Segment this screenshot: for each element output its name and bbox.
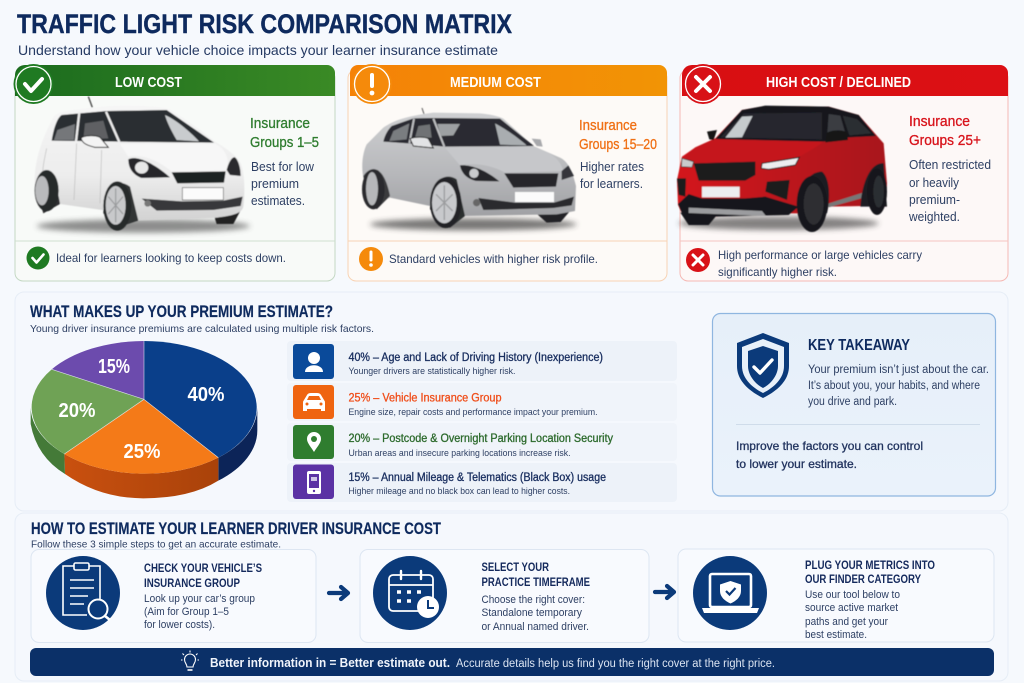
key takeaway advice (736, 439, 923, 471)
step 1 card (31, 550, 316, 642)
panel: how to estimate (15, 513, 1008, 681)
low cost header: LOW COST (115, 74, 182, 91)
step 2 body: Standalone temporary (482, 607, 582, 619)
panel: low cost (14, 64, 335, 281)
key takeaway body: you drive and park. (808, 396, 897, 408)
low cost note: Ideal for learners looking to keep costs down. (56, 251, 286, 265)
medium cost header (350, 65, 667, 96)
icon: footer cross (686, 248, 710, 272)
step 2 card (360, 550, 649, 642)
step 2 title: SELECT YOUR (482, 562, 550, 574)
icon: shield (737, 333, 789, 398)
low cost group label: Groups 1–5 (250, 135, 319, 151)
step 3 body: Use our tool below to (805, 589, 900, 601)
low cost description: Best for low (251, 160, 315, 174)
legend row: mileage (293, 464, 606, 499)
panel: medium cost (348, 64, 667, 281)
medium cost description: for learners. (580, 177, 643, 191)
step 3 title: OUR FINDER CATEGORY (805, 574, 921, 586)
medium cost group label (579, 118, 657, 153)
high cost header: HIGH COST / DECLINED (766, 74, 911, 91)
pie label 40%: 40% (188, 384, 225, 406)
banner (30, 648, 994, 676)
high cost description: Often restricted (909, 158, 991, 172)
medium cost note: Standard vehicles with higher risk profile. (389, 252, 598, 266)
step 3 body: paths and get your (805, 616, 888, 628)
medium cost group label: Groups 15–20 (579, 137, 657, 153)
high cost note (718, 248, 922, 279)
step 1 title (144, 563, 262, 590)
legend row: vehicle: Engine size, repair costs and performance impact your premium. (348, 407, 598, 418)
high cost description (908, 158, 991, 224)
step 1 title: CHECK YOUR VEHICLE’S (144, 563, 262, 575)
car: white hatchback (35, 97, 250, 233)
legend row: postcode: 20% – Postcode & Overnight Parking Location Security (348, 433, 613, 445)
banner text: Accurate details help us find you the right cover at the right price. (456, 658, 775, 670)
step 2 title (482, 562, 590, 589)
medium cost group label: Insurance (579, 118, 637, 134)
car: red suv (677, 106, 887, 232)
step 1 body: Look up your car’s group (144, 593, 255, 605)
how-to subheading: Follow these 3 simple steps to get an accurate estimate. (31, 538, 281, 550)
icon: clipboard search (46, 556, 120, 630)
key takeaway body (808, 364, 989, 408)
legend row: mileage: 15% – Annual Mileage & Telematics (Black Box) usage (348, 472, 606, 484)
icon: footer check (26, 246, 50, 270)
legend row: age (293, 344, 603, 379)
legend row: mileage: Higher mileage and no black box can lead to higher costs. (348, 486, 570, 497)
icon: footer warning (359, 247, 383, 271)
low cost header (15, 65, 335, 96)
legend row: vehicle (293, 385, 598, 419)
key takeaway advice: to lower your estimate. (736, 457, 857, 471)
step 2 body: or Annual named driver. (482, 621, 589, 633)
arrow (329, 587, 348, 599)
step 3 card (678, 549, 994, 642)
low cost description: estimates. (251, 194, 305, 208)
how-to heading: HOW TO ESTIMATE YOUR LEARNER DRIVER INSURANCE COST (31, 519, 441, 538)
key takeaway body: It’s about you, your habits, and where (808, 380, 980, 392)
high cost description: or heavily (909, 176, 960, 190)
icon: cross badge (683, 64, 723, 104)
legend row: age: Younger drivers are statistically higher risk. (348, 366, 516, 377)
icon: calendar clock (373, 556, 447, 630)
step 3 body (805, 589, 900, 641)
low cost description (251, 160, 315, 208)
step 2 body (482, 594, 589, 633)
medium cost description (580, 160, 644, 191)
high cost group label: Groups 25+ (909, 133, 981, 149)
legend row: postcode (293, 425, 613, 459)
legend row: postcode: Urban areas and insecure parking locations increase risk. (348, 448, 570, 459)
high cost group label: Insurance (909, 114, 970, 130)
high cost note: significantly higher risk. (718, 265, 837, 279)
banner bold text: Better information in = Better estimate out. (210, 656, 450, 670)
medium cost description: Higher rates (580, 160, 644, 174)
high cost note: High performance or large vehicles carry (718, 248, 922, 262)
step 3 title (805, 560, 935, 586)
legend row: age: 40% – Age and Lack of Driving History (Inexperience) (348, 352, 603, 364)
key takeaway title: KEY TAKEAWAY (808, 337, 911, 354)
low cost description: premium (251, 177, 299, 191)
arrow (655, 586, 674, 598)
car: silver sedan (362, 108, 577, 230)
premium heading: WHAT MAKES UP YOUR PREMIUM ESTIMATE? (30, 302, 333, 321)
icon: warning badge (352, 64, 392, 104)
step 3 title: PLUG YOUR METRICS INTO (805, 560, 935, 572)
step 2 title: PRACTICE TIMEFRAME (482, 577, 590, 589)
callout: key takeaway (712, 314, 996, 496)
title: TRAFFIC LIGHT RISK COMPARISON MATRIX (17, 9, 512, 39)
high cost description: weighted. (908, 210, 960, 224)
high cost header (682, 65, 1008, 96)
key takeaway advice: Improve the factors you can control (736, 439, 923, 453)
step 1 body (144, 593, 255, 631)
step 2 body: Choose the right cover: (482, 594, 585, 606)
key takeaway body: Your premium isn’t just about the car. (808, 364, 989, 376)
icon: laptop shield (693, 556, 767, 630)
low cost group label (250, 116, 319, 151)
high cost description: premium- (909, 193, 960, 207)
legend (287, 341, 677, 502)
icon: light bulb (181, 650, 199, 670)
icon: check badge (14, 64, 54, 104)
pie chart (31, 341, 257, 498)
pie label 25%: 25% (124, 441, 161, 463)
panel: high cost (677, 64, 1008, 281)
step 1 title: INSURANCE GROUP (144, 578, 240, 590)
premium subheading: Young driver insurance premiums are calculated using multiple risk factors. (30, 323, 374, 335)
subtitle: Understand how your vehicle choice impacts your learner insurance estimate (18, 42, 498, 58)
low cost group label: Insurance (250, 116, 310, 132)
high cost group label (909, 114, 981, 149)
step 1 body: for lower costs). (144, 619, 215, 631)
pie label 15%: 15% (98, 356, 130, 378)
medium cost header: MEDIUM COST (450, 74, 541, 91)
step 1 body: (Aim for Group 1–5 (144, 606, 229, 618)
legend row: vehicle: 25% – Vehicle Insurance Group (348, 392, 502, 404)
pie label 20%: 20% (58, 400, 96, 422)
step 3 body: source active market (805, 602, 898, 614)
panel: premium estimate (15, 292, 1008, 511)
step 3 body: best estimate. (805, 629, 867, 641)
